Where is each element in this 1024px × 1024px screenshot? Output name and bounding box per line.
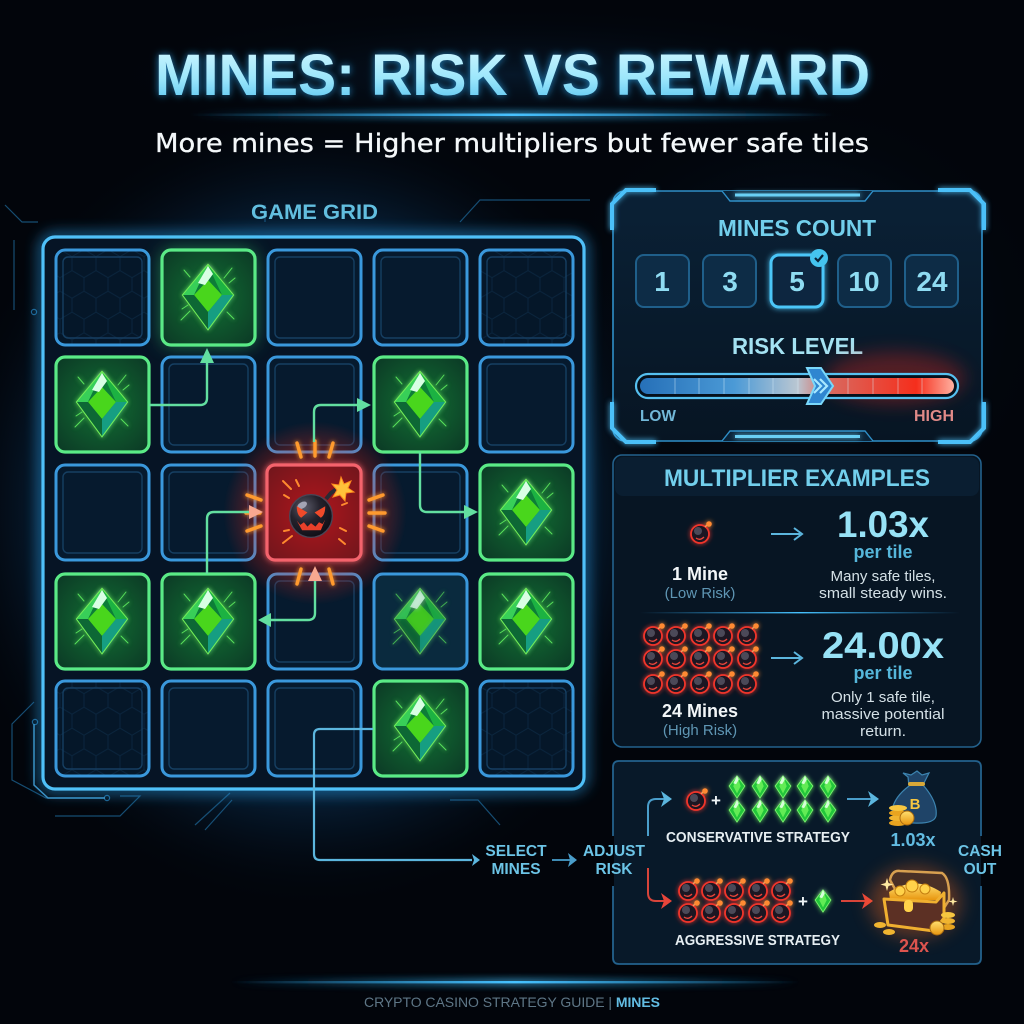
panel: multiplier examples xyxy=(613,455,981,747)
flow label: adjust risk xyxy=(583,843,646,878)
mines count buttons: 24 xyxy=(916,266,948,297)
arrow: gem to bomb left xyxy=(207,505,263,574)
mines count buttons xyxy=(636,249,958,307)
example: one mine xyxy=(665,504,947,602)
mines count heading: MINES COUNT xyxy=(718,215,876,241)
example: twenty-four mines: 24.00x xyxy=(822,625,944,666)
high label: HIGH xyxy=(914,408,954,425)
icon: treasure chest xyxy=(869,866,961,938)
example: one mine: Many safe tiles, xyxy=(830,569,936,585)
arrow: gem to bomb bottom xyxy=(258,566,322,627)
heading band xyxy=(615,457,979,496)
example: twenty-four mines: per tile xyxy=(853,663,913,683)
row 4 tiles xyxy=(56,574,573,669)
icon: money bag xyxy=(889,771,936,826)
example: one mine: small steady wins. xyxy=(819,586,947,602)
example: one mine: per tile xyxy=(853,542,913,562)
example: twenty-four mines: return. xyxy=(860,724,906,740)
risk level slider xyxy=(636,352,965,404)
panel: mines count and risk level xyxy=(612,190,984,442)
flow label: select mines: MINES xyxy=(491,861,541,878)
flow label: select mines: SELECT xyxy=(485,843,547,860)
icon: green gems on tiles xyxy=(75,265,553,760)
example: twenty-four mines: Only 1 safe tile, xyxy=(831,690,935,706)
arrow: gem to gem, top left xyxy=(149,348,214,405)
corner brackets xyxy=(612,190,984,442)
mines count buttons: 10 xyxy=(848,266,880,297)
circuit decorations xyxy=(5,200,590,830)
example: twenty-four mines: 24 Mines xyxy=(662,701,738,721)
row 5 tiles xyxy=(56,681,573,776)
row 2 tiles xyxy=(56,357,573,452)
example: twenty-four mines: massive potential xyxy=(822,707,944,723)
arrow: select to adjust xyxy=(552,853,577,867)
multiplier heading: MULTIPLIER EXAMPLES xyxy=(664,465,930,492)
icon: ten bombs xyxy=(679,878,793,922)
example: twenty-four mines: (High Risk) xyxy=(663,722,737,739)
icon: red bomb tile xyxy=(223,421,407,605)
panel: strategies xyxy=(613,761,981,964)
mines count buttons: 1 xyxy=(654,266,670,297)
row 3 tiles xyxy=(56,465,573,560)
flow label: adjust risk: RISK xyxy=(595,861,633,878)
mines count buttons: 3 xyxy=(722,266,738,297)
divider xyxy=(640,612,960,613)
example: twenty-four mines xyxy=(644,623,944,740)
example: one mine: (Low Risk) xyxy=(665,585,735,602)
flow label: select mines xyxy=(485,843,547,878)
flow label: cash out: OUT xyxy=(964,861,997,878)
panel: game grid frame xyxy=(43,237,584,789)
aggressive strategy row: 24x xyxy=(899,936,929,956)
title: MINES: RISK VS REWARD xyxy=(155,43,870,108)
arrow: bomb up to gem xyxy=(314,398,371,442)
icon: small bomb cluster xyxy=(644,623,759,693)
conservative strategy row: 1.03x xyxy=(890,830,936,850)
flow label: adjust risk: ADJUST xyxy=(583,843,646,860)
game grid heading: GAME GRID xyxy=(251,201,378,224)
row 1 tiles xyxy=(56,250,573,345)
arrow: grid to select mines xyxy=(314,729,480,866)
low label: LOW xyxy=(640,408,676,425)
conservative strategy row: + xyxy=(711,791,721,810)
title underline xyxy=(190,114,834,116)
flow label: cash out: CASH xyxy=(958,843,1002,860)
icon: ten gems xyxy=(729,776,836,822)
conservative strategy row xyxy=(648,771,936,850)
aggressive strategy row: + xyxy=(798,892,808,911)
top and bottom notches xyxy=(722,191,873,441)
subtitle: More mines = Higher multipliers but fewer safe tiles xyxy=(155,129,869,159)
aggressive strategy row xyxy=(648,866,961,956)
aggressive strategy row: AGGRESSIVE STRATEGY xyxy=(675,933,840,949)
mines count buttons: 5 xyxy=(789,266,805,297)
icon: money bag: B xyxy=(910,796,921,813)
risk level heading: RISK LEVEL xyxy=(732,333,863,359)
footer line xyxy=(230,981,800,983)
flow label: cash out xyxy=(958,843,1002,878)
footer text: CRYPTO CASINO STRATEGY GUIDE | MINES xyxy=(364,994,660,1010)
conservative strategy row: CONSERVATIVE STRATEGY xyxy=(666,830,850,846)
example: one mine: 1 Mine xyxy=(672,564,728,584)
arrow: gem down to right gem xyxy=(420,452,478,519)
example: one mine: 1.03x xyxy=(837,504,929,545)
